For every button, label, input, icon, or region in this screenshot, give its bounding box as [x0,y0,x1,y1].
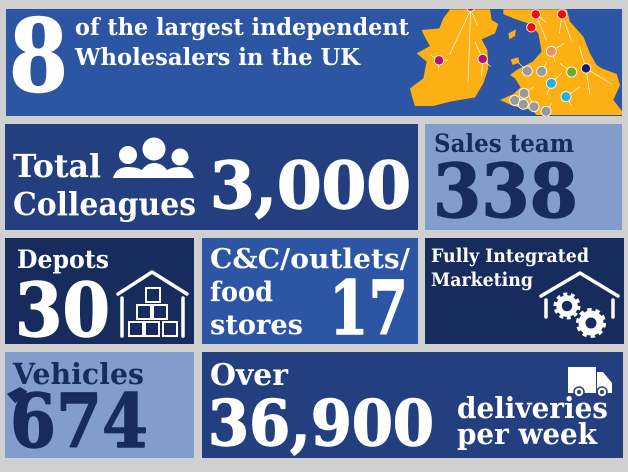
icon: truck [568,367,612,397]
label: Vehicles [12,357,144,391]
label: food [210,277,273,308]
delivery text: per week [457,417,598,451]
label: C&C/outlets/ [210,244,410,275]
heading: Wholesalers in the UK [74,44,361,71]
label: stores [210,310,303,341]
value: 3,000 [210,148,411,224]
delivery text [457,391,608,451]
value: 17 [329,266,408,352]
heading: of the largest independent [75,14,409,41]
heading [74,14,409,71]
value: 30 [15,268,110,354]
panel: total colleagues [5,124,418,230]
icon: small van [7,387,27,403]
panel: 8 largest wholesalers [6,0,625,116]
label: Colleagues [13,185,196,223]
panel: fully integrated marketing [425,238,624,344]
icon: warehouse with boxes [118,272,187,336]
panel: deliveries [202,352,623,460]
label: Marketing [431,269,533,291]
icon: building with gears [541,273,618,336]
label [210,244,410,341]
label: Fully Integrated [431,245,589,267]
panel: depots [5,238,194,354]
panel: C&C outlets food stores [202,238,418,352]
delivery text: deliveries [457,391,608,425]
label [431,245,589,291]
big number 8: 8 [9,0,68,115]
map of UK and Ireland [410,3,625,116]
value: 674 [10,379,148,465]
icon: people [113,138,194,178]
value: 36,900 [208,386,434,460]
value: 338 [433,149,578,235]
label: Sales team [434,129,574,158]
panel: sales team [425,124,622,235]
label [13,147,196,223]
label: Depots [17,245,109,274]
label: Over [210,358,289,393]
panel: vehicles [5,352,194,465]
map connector lines [431,10,611,111]
label: Total [13,147,101,185]
map location markers [434,3,591,116]
